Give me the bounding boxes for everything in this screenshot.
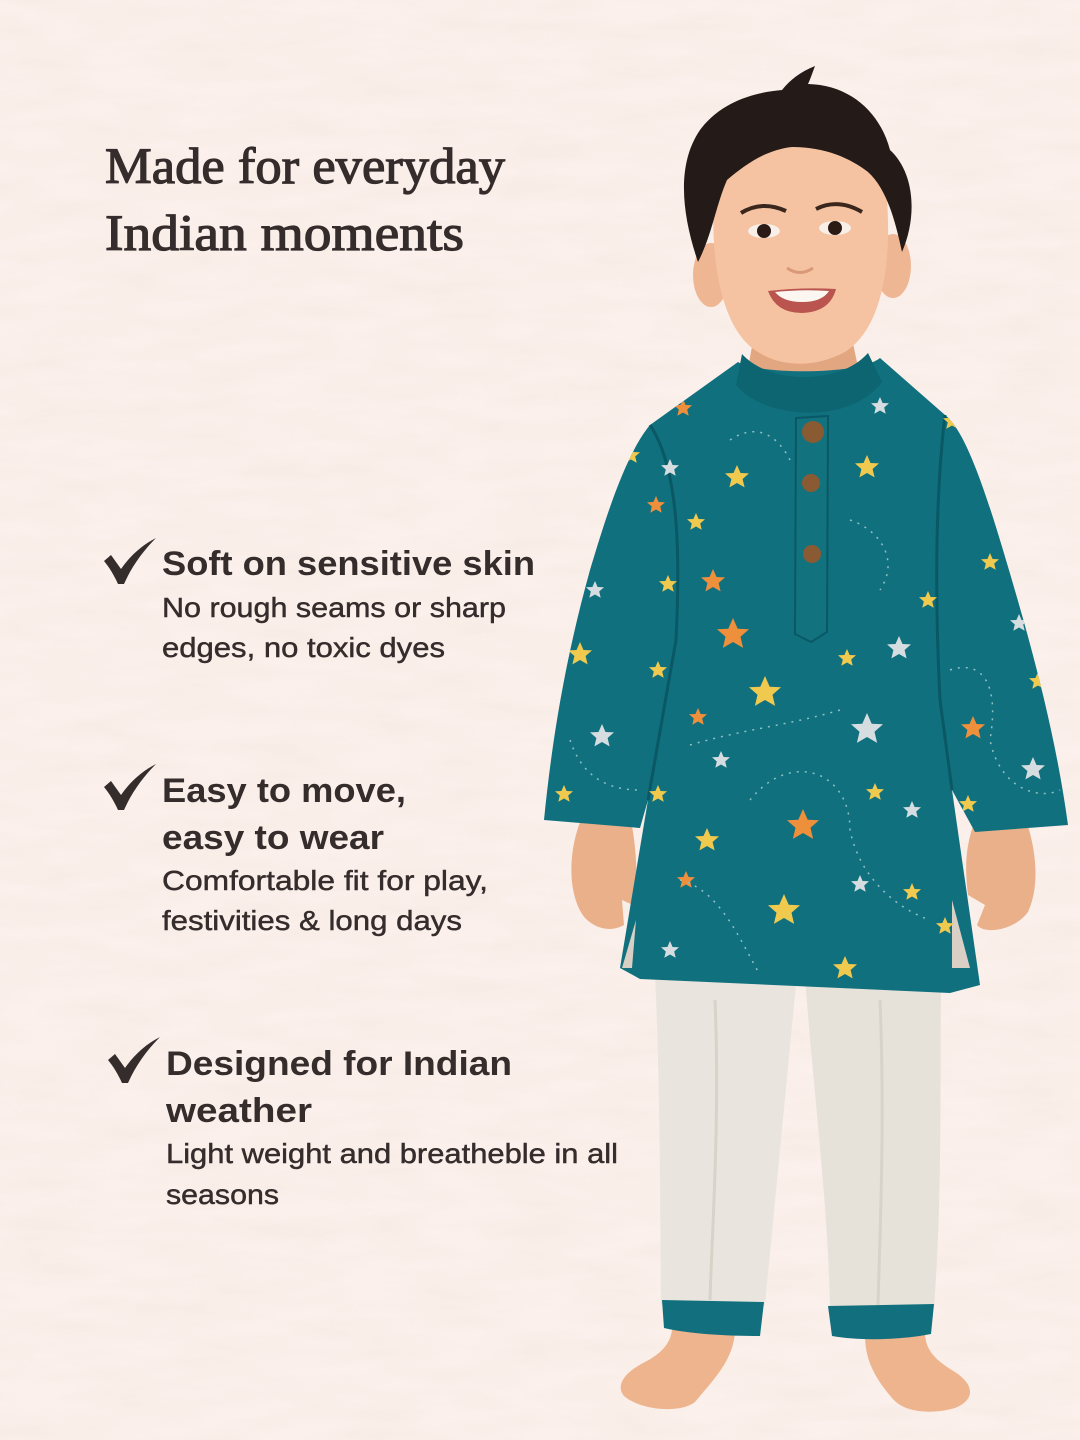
- face: [713, 144, 888, 364]
- title: Indian moments: [105, 206, 464, 262]
- icon: check mark: [108, 1037, 160, 1083]
- title: [105, 139, 506, 262]
- icon: check mark: [104, 538, 156, 584]
- feet: [621, 1330, 970, 1412]
- trousers: [655, 975, 941, 1308]
- benefit: easy to move: [104, 764, 488, 936]
- neck: [745, 330, 862, 385]
- placket: [795, 416, 828, 642]
- smile: [768, 288, 836, 313]
- benefit heading: easy to wear: [162, 819, 384, 857]
- hair: [684, 66, 912, 262]
- benefit text: edges, no toxic dyes: [162, 632, 445, 663]
- nose: [787, 268, 813, 272]
- benefit: soft on sensitive skin: [104, 538, 535, 663]
- benefit: designed for Indian weather: [108, 1037, 618, 1210]
- trouser cuffs: [662, 1300, 934, 1339]
- benefit heading: Soft on sensitive skin: [162, 545, 535, 583]
- benefit text: seasons: [166, 1179, 279, 1210]
- eyes and brows: [741, 204, 862, 238]
- benefit text: [162, 865, 488, 936]
- side slits: [622, 900, 970, 968]
- star print: [555, 397, 1047, 978]
- benefit heading: [162, 772, 406, 857]
- benefit text: [162, 592, 506, 663]
- icon: check mark: [104, 764, 156, 810]
- collar: [736, 353, 882, 413]
- benefit text: festivities & long days: [162, 905, 462, 936]
- ears: [693, 234, 911, 307]
- benefit text: Comfortable fit for play,: [162, 865, 488, 896]
- dotted swirl print: [570, 432, 1060, 975]
- benefit text: [166, 1138, 618, 1210]
- buttons: [802, 421, 824, 563]
- illustration: smiling boy in teal star kurta: [544, 66, 1068, 1412]
- title: Made for everyday: [105, 139, 506, 195]
- sleeve and body shading: [648, 415, 952, 800]
- hands: [571, 822, 1036, 930]
- benefit heading: Designed for Indian: [166, 1045, 512, 1083]
- benefit heading: weather: [165, 1092, 312, 1130]
- benefit text: No rough seams or sharp: [162, 592, 506, 623]
- benefit text: Light weight and breatheble in all: [166, 1138, 618, 1169]
- benefit heading: [165, 1045, 512, 1130]
- benefit heading: Easy to move,: [162, 772, 406, 810]
- kurta: [544, 358, 1068, 993]
